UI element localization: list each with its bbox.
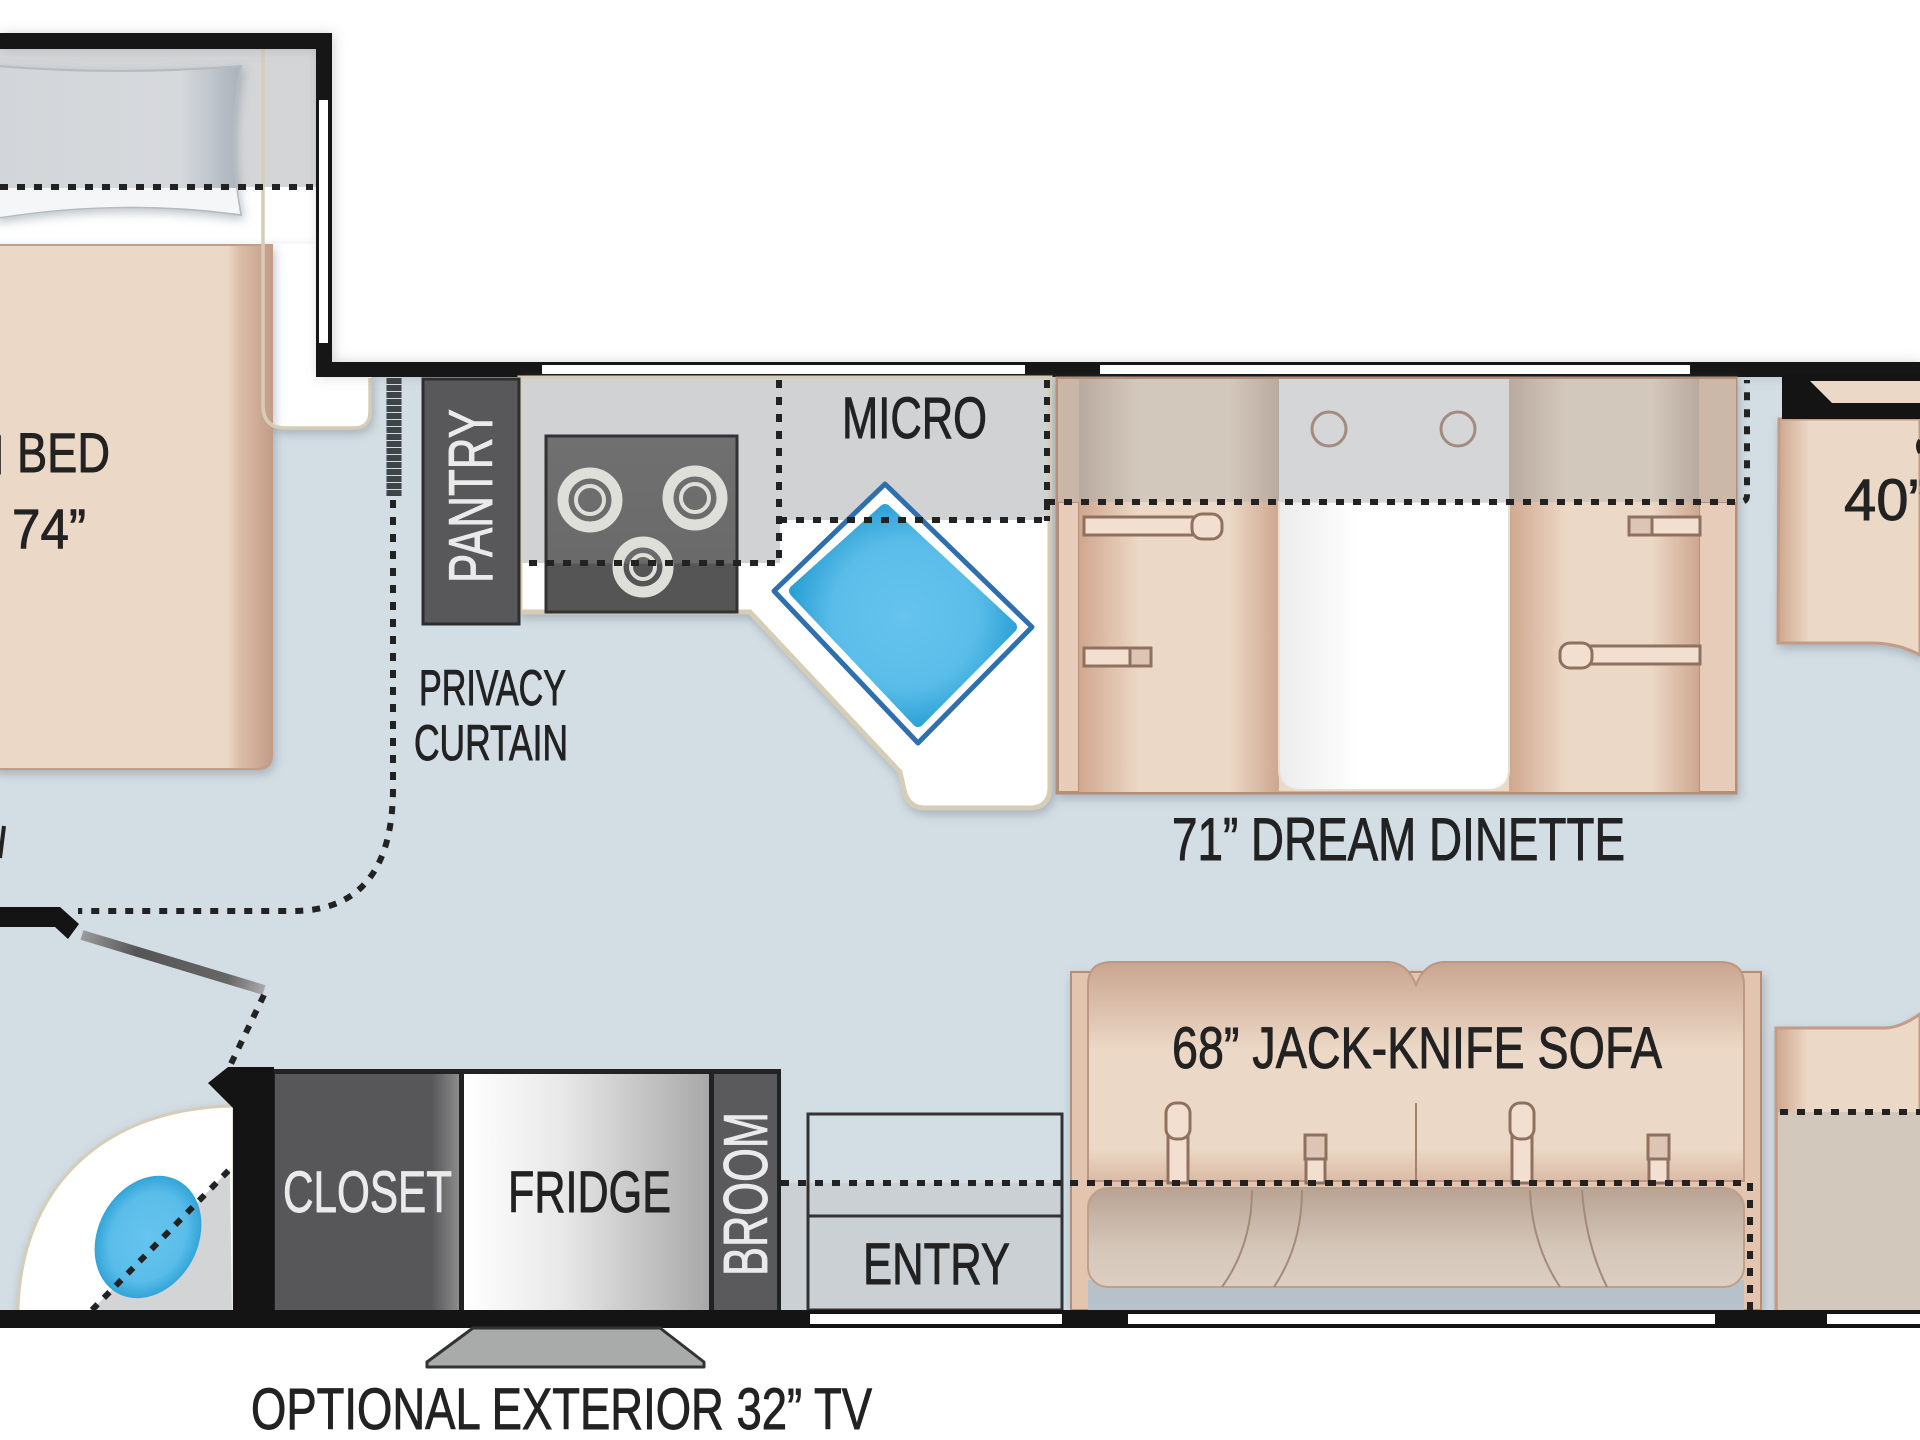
cushion seam lines (1222, 1190, 1607, 1287)
sofa seat divider (1415, 1103, 1417, 1181)
bed size label: 74” (12, 497, 86, 560)
toilet bowl (74, 1157, 222, 1317)
bottom wall (0, 1310, 1920, 1328)
seat belt right upper (1629, 517, 1700, 535)
right back strip (1699, 502, 1736, 792)
floor below sofa (1088, 1280, 1744, 1310)
floor (0, 370, 1920, 1315)
entry label: ENTRY (863, 1232, 1010, 1297)
overhead cabinet shade right (780, 379, 1048, 520)
seat belt left upper (1084, 514, 1222, 539)
table cup holder right (1441, 412, 1475, 446)
optional exterior TV (427, 1328, 704, 1367)
sofa overhead dotted line (781, 1183, 1750, 1310)
lower window 2 (1827, 1314, 1920, 1324)
lower window 1 (1128, 1314, 1715, 1324)
burner right (668, 471, 722, 525)
cab window ledge (1810, 381, 1920, 403)
dinette table (1279, 502, 1509, 790)
seat belt left lower (1084, 648, 1151, 666)
seat belt right lower (1560, 643, 1700, 668)
sofa seat belt 1 (1166, 1103, 1190, 1183)
sofa seat belt 3 (1510, 1103, 1534, 1183)
left bench overhead shade (1079, 379, 1279, 502)
cab wall (1782, 375, 1920, 419)
cab sofa lower (1776, 1014, 1920, 1310)
pillow lower highlight (0, 188, 240, 217)
privacy curtain label: PRIVACY (419, 660, 566, 716)
table overhead shade (1279, 379, 1509, 502)
bathroom door swing (228, 995, 264, 1070)
nightstand (265, 245, 370, 428)
cut off letter fragment (1918, 440, 1920, 453)
microwave label: MICRO (842, 386, 987, 451)
right back strip overhead (1699, 379, 1736, 502)
toilet dotted diagonal (92, 1169, 230, 1310)
sofa cushion (1088, 1188, 1744, 1287)
closet fridge broom block (274, 1069, 781, 1310)
toilet overhead shade (92, 1169, 232, 1310)
bed label: BED (17, 421, 110, 484)
sofa label: 68” JACK-KNIFE SOFA (1172, 1016, 1662, 1081)
bathroom pillar wall (208, 1067, 274, 1312)
privacy curtain label (414, 660, 568, 771)
bathroom door (82, 935, 264, 990)
pantry (423, 379, 519, 624)
fridge: FRIDGE (508, 1160, 671, 1225)
bedroom overhead dotted line (0, 184, 313, 190)
toilet (18, 1106, 234, 1317)
upper window 1 (542, 365, 1025, 374)
cab sleeper upper (1778, 419, 1920, 655)
sofa back (1088, 962, 1744, 1181)
sofa seat belt 4 (1648, 1135, 1669, 1183)
left bench (1079, 502, 1279, 792)
sofa seat belt 2 (1305, 1135, 1326, 1183)
bathroom wall stub (0, 907, 79, 939)
entry door threshold (810, 1314, 1062, 1324)
broom closet: BROOM (712, 1112, 781, 1276)
closet: CLOSET (283, 1160, 452, 1225)
slide-out walls (0, 33, 1920, 377)
stove (546, 436, 737, 612)
cab lower overhead shade (1778, 1112, 1920, 1310)
entry step (781, 1114, 1062, 1310)
fridge (464, 1074, 709, 1310)
overhead cabinet shade left (522, 379, 780, 563)
main bedroom slide interior (0, 45, 320, 370)
closet (275, 1074, 459, 1310)
bed (0, 245, 272, 769)
privacy curtain track (78, 500, 393, 911)
sink basin (795, 510, 1011, 721)
dinette label: 71” DREAM DINETTE (1172, 806, 1625, 873)
left edge fragment (0, 826, 4, 858)
left back strip (1058, 502, 1079, 792)
upper window 2 (1100, 365, 1690, 374)
slide-out window (319, 100, 328, 343)
burner front (618, 542, 668, 592)
dinette (1057, 378, 1736, 793)
privacy curtain label: CURTAIN (414, 715, 568, 771)
right bench (1509, 502, 1699, 792)
right bench overhead shade (1509, 379, 1699, 502)
kitchen counter (520, 378, 1050, 808)
sofa (1071, 962, 1761, 1310)
burner left (563, 473, 617, 527)
pantry label: PANTRY (437, 409, 506, 583)
headboard and nightstand edge line (263, 49, 370, 428)
sink (774, 484, 1032, 743)
dinette overhead dotted line (1047, 380, 1747, 521)
privacy curtain gathered (386, 378, 402, 497)
table cup holder left (1312, 412, 1346, 446)
left back strip overhead (1058, 379, 1079, 502)
cab lower dotted line (1780, 1109, 1920, 1115)
kitchen overhead dotted lines (524, 380, 1047, 563)
pillow (0, 66, 241, 218)
